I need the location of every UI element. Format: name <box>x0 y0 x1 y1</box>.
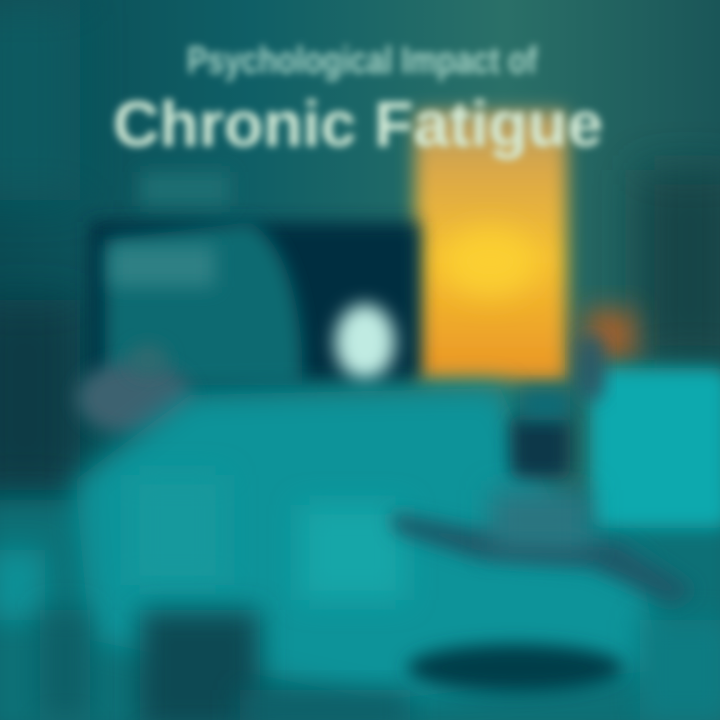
dark figure <box>390 335 695 604</box>
title line 1: Psychological Impact of <box>187 40 537 82</box>
panel: dark window <box>90 222 420 382</box>
panel: teal figure <box>77 172 302 434</box>
dark shadow shape <box>407 644 623 692</box>
panel: teal lower area <box>0 368 720 720</box>
icon: water drop <box>335 304 395 380</box>
title line 2: Chronic Fatigue <box>113 88 603 160</box>
panel: orange sunset <box>415 110 635 380</box>
title <box>113 40 603 160</box>
